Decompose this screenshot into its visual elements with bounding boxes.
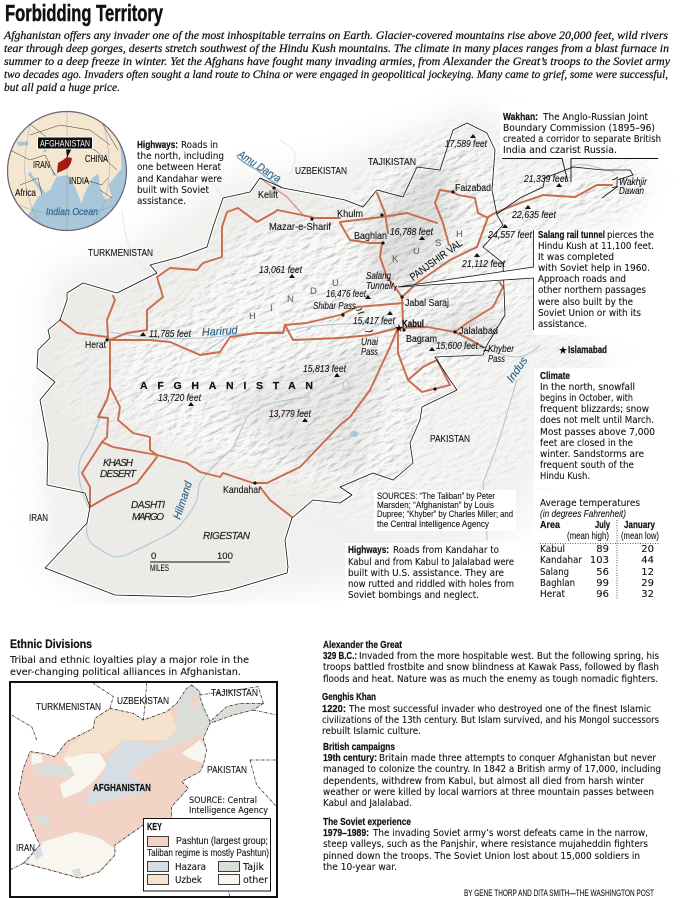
history: The Soviet experience: The Soviet experience xyxy=(323,816,411,828)
temperature table: (mean high) xyxy=(567,530,609,542)
ethnic regions xyxy=(10,683,277,897)
elevation and pass labels xyxy=(149,138,647,420)
annotation: Wakhan: Wakhan: xyxy=(503,111,538,123)
temperature table: 12 xyxy=(641,567,654,578)
city labels: Mazar-e-Sharif xyxy=(269,221,331,233)
pass markers xyxy=(356,177,618,351)
elevation and pass labels: 11,785 feet xyxy=(149,328,192,340)
relief labels: Hindu Kush: U xyxy=(332,278,339,289)
Afghanistan land xyxy=(37,123,505,597)
annotation: Salang rail tunnel: Hindu Kush at 11,100 feet. xyxy=(538,241,654,252)
scale bar xyxy=(150,551,233,574)
annotation: Salang rail tunnel: Salang rail tunnel xyxy=(538,229,605,241)
history: The Soviet experience: pinned down the troops. The Soviet Union lost about 15,000 soldiers in xyxy=(323,851,640,862)
key: KEY xyxy=(147,821,162,833)
river labels: Harirud xyxy=(201,324,239,339)
relief labels: Hindu Kush xyxy=(249,229,463,322)
Pashtun base xyxy=(18,685,263,878)
annotation: northern highways: one between Herat xyxy=(137,162,221,173)
annotation: northern highways: Roads in xyxy=(181,140,218,151)
annotation: southern highways: Highways: xyxy=(348,544,389,556)
city labels: Jabal Saraj xyxy=(405,297,449,309)
elevation and pass labels: 24,557 feet xyxy=(487,229,533,241)
rivers xyxy=(79,140,615,557)
annotation: Salang rail tunnel xyxy=(538,229,654,330)
shaded relief xyxy=(50,121,648,518)
temperature table: 89 xyxy=(596,544,609,555)
leader: Salang tunnel xyxy=(398,230,534,330)
intro paragraph: summer to a deep freeze in winter. Yet the Afghans have fought many invading armies, from Alexander the Great’s troops to the Soviet army xyxy=(4,54,671,68)
annotation: climate: frequent blizzards; snow xyxy=(540,404,649,415)
temperature table: Area xyxy=(540,519,560,531)
globe labels: Africa xyxy=(15,187,36,199)
elevation and pass labels: 22,635 feet xyxy=(511,209,557,221)
intro paragraph: but all paid a huge price. xyxy=(4,80,120,94)
scale bar: 0 xyxy=(151,551,156,562)
landmass xyxy=(8,112,122,215)
annotation: Salang rail tunnel: with Soviet help in 1960. xyxy=(538,263,650,274)
source note: SOURCE: Central xyxy=(189,796,257,806)
relief labels: Hindu Kush: I xyxy=(270,303,273,314)
intro paragraph: tear through deep gorges, deserts stretch southwest of the Hindu Kush mountains. The climate in many places ranges from a blast furnace in xyxy=(4,41,669,55)
history: Genghis Khan xyxy=(322,691,659,737)
ocean xyxy=(7,111,127,231)
highways xyxy=(60,178,612,517)
annotation: climate xyxy=(540,370,655,482)
river labels: Amu Darya xyxy=(235,148,283,185)
relief labels: Hindu Kush: D xyxy=(310,286,317,297)
Wakhan corridor border xyxy=(497,167,633,214)
temperature table: 96 xyxy=(596,589,609,600)
annotation: northern highways: assistance. xyxy=(137,196,186,207)
annotation: climate: Most passes above 7,000 xyxy=(540,427,655,438)
temperature table: Herat xyxy=(540,589,565,600)
temperature table: 20 xyxy=(641,544,654,555)
elevation and pass labels: 13,720 feet xyxy=(158,392,202,404)
region labels xyxy=(100,458,252,542)
city labels xyxy=(85,182,607,496)
country labels: TURKMENISTAN xyxy=(88,247,153,259)
history: The Soviet experience: The invading Soviet army’s worst defeats came in the narrow, xyxy=(372,828,648,839)
country and neighbour borders xyxy=(10,683,277,897)
history: Alexander the Great xyxy=(323,639,659,685)
city labels: Faizabad xyxy=(455,182,491,194)
country labels: IRAN xyxy=(29,512,48,524)
annotation: Wakhan: Boundary Commission (1895–96) xyxy=(503,123,655,134)
annotation: northern highways: and Kandahar were xyxy=(137,174,222,185)
darker mountain shading xyxy=(370,160,450,290)
history: British campaigns xyxy=(323,741,661,809)
annotation: Salang rail tunnel: pierces the xyxy=(607,230,654,241)
locator globe xyxy=(6,110,128,232)
heading: ethnic divisions: Ethnic Divisions xyxy=(10,637,92,651)
region labels: MARGO xyxy=(132,512,166,523)
country labels: PAKISTAN xyxy=(430,433,470,445)
annotation: Salang rail tunnel: assistance. xyxy=(538,319,587,330)
elevation and pass labels: Unai xyxy=(361,336,379,348)
annotation: northern highways: the north, including xyxy=(137,151,224,162)
Afghanistan callout tag: AFGHANISTAN xyxy=(40,138,90,150)
history: The Soviet experience xyxy=(323,816,648,873)
history: Alexander the Great: 329 B.C.: xyxy=(323,650,357,662)
region labels: DASHTI xyxy=(131,500,167,511)
annotation: southern highways: Soviet bombings and neglect. xyxy=(348,590,479,601)
elevation and pass labels: 16,476 feet xyxy=(326,288,367,300)
history: British campaigns: Kabul and Jalalabad. xyxy=(323,798,412,809)
sources note: Dupree; “Khyber” by Charles Miller; and xyxy=(377,509,513,520)
map labels: TAJIKISTAN xyxy=(211,687,258,699)
annotation: Salang rail tunnel: It was completed xyxy=(538,252,614,263)
sources note xyxy=(377,491,513,530)
elevation and pass labels: Khyber xyxy=(488,343,514,355)
annotation: climate: winter. Sandstorms are xyxy=(540,449,644,460)
city labels: Khulm xyxy=(337,208,363,220)
globe labels: CHINA xyxy=(85,153,108,165)
history: Genghis Khan: rebuilt Islamic culture. xyxy=(322,726,421,737)
elevation and pass labels: Wakhjir xyxy=(619,176,647,188)
elevation and pass labels: 15,813 feet xyxy=(303,363,347,375)
globe labels: IRAN xyxy=(33,159,50,171)
map labels: PAKISTAN xyxy=(207,764,247,776)
elevation and pass labels: 16,788 feet xyxy=(390,226,434,238)
map labels xyxy=(16,687,258,854)
key: Hazara xyxy=(175,862,206,873)
history: The Soviet experience: the 10-year war. xyxy=(323,862,397,873)
elevation and pass labels: Tunnel xyxy=(366,280,392,292)
other groups xyxy=(27,740,207,877)
ethnic map panel xyxy=(10,682,277,897)
annotation: southern highways: now rutted and riddled with holes from xyxy=(348,579,514,590)
annotation: southern highways: Roads from Kandahar to xyxy=(393,545,499,556)
scale bar: MILES xyxy=(150,563,169,574)
map labels: AFGHANISTAN xyxy=(93,782,151,794)
city labels: Kandahar xyxy=(223,484,261,496)
region labels: RIGESTAN xyxy=(203,531,252,542)
Panjshir Valley label: PANJSHIR VAL xyxy=(408,237,465,283)
city labels: Jalalabad xyxy=(459,325,498,337)
key xyxy=(144,818,270,891)
key: Tajik xyxy=(242,862,264,873)
Tajik region xyxy=(157,686,209,750)
elevation and pass labels: Pass xyxy=(361,346,379,358)
annotation: climate: frequent south of the xyxy=(540,460,634,471)
elevation and pass labels: Salang xyxy=(366,270,391,282)
temperature table: Kandahar xyxy=(540,555,583,566)
Afghanistan highlighted xyxy=(57,157,72,173)
map labels: TURKMENISTAN xyxy=(36,701,101,713)
elevation and pass labels: 17,589 feet xyxy=(445,138,488,150)
temperature table: Baghlan xyxy=(540,578,575,589)
title: Forbidding Territory xyxy=(5,0,163,26)
annotation: climate: Climate xyxy=(540,370,570,382)
annotation: southern highways: built with U.S. assistance. They are xyxy=(348,568,504,579)
key: Taliban regime is mostly Pashtun) xyxy=(147,847,269,859)
history: Genghis Khan: 1220: xyxy=(322,703,346,715)
annotation: northern highways: built with Soviet xyxy=(137,185,209,196)
temperature table: Average temperatures xyxy=(540,498,640,509)
surrounding terrain halo xyxy=(40,105,650,605)
region labels: KHASH xyxy=(103,458,135,469)
border line xyxy=(37,123,505,597)
temperature table: 103 xyxy=(590,555,609,566)
city labels: Bagram xyxy=(406,333,437,345)
main map of Afghanistan xyxy=(30,108,652,604)
Uzbek region xyxy=(63,710,177,758)
region labels: DESERT xyxy=(100,469,138,480)
intro paragraph: Afghanistan offers any invader one of the most inhospitable terrains on Earth. Glacier-covered mountains rise above 20,000 feet, wild rivers xyxy=(3,28,668,42)
history: The Soviet experience: steep valleys, such as the Panjshir, where resistance mujaheddin fighters xyxy=(323,839,648,850)
map labels: IRAN xyxy=(16,842,35,854)
annotation: Salang rail tunnel: Approach roads and xyxy=(538,274,626,285)
river labels: Indus xyxy=(505,354,531,385)
relief labels: Hindu Kush: U xyxy=(413,246,420,257)
globe labels: INDIA xyxy=(69,175,89,187)
sources note: Marsden; “Afghanistan” by Louis xyxy=(377,500,494,511)
city labels: Herat xyxy=(85,339,106,351)
relief labels: Hindu Kush: K xyxy=(392,254,399,265)
history: British campaigns: 19th century: xyxy=(323,752,377,764)
scale bar: 100 xyxy=(217,551,233,562)
annotation: climate: Hindu Kush. xyxy=(540,471,590,482)
sources note: SOURCES: “The Taliban” by Peter xyxy=(377,491,495,502)
source note xyxy=(189,796,269,816)
ethnic divisions description: Tribal and ethnic loyalties play a major role in the xyxy=(9,655,249,666)
country labels: UZBEKISTAN xyxy=(295,165,347,177)
temperature table: Kabul xyxy=(540,544,565,555)
ethnic divisions description: ever-changing political alliances in Afghanistan. xyxy=(10,667,241,678)
key: Pashtun (largest group; xyxy=(176,835,268,847)
relief labels: Hindu Kush: H xyxy=(456,229,463,240)
seas xyxy=(16,140,123,194)
map frame xyxy=(10,682,277,897)
temperature table: 32 xyxy=(641,589,654,600)
elevation and pass labels: 21,112 feet xyxy=(461,258,506,270)
temperature table: January xyxy=(624,519,655,531)
history: British campaigns: dependents, withdrew from Kabul, but almost all died from harsh winter xyxy=(323,776,645,787)
annotation: climate: does not melt until March. xyxy=(540,415,654,426)
river labels: Hilmand xyxy=(171,479,195,521)
country labels: TAJIKISTAN xyxy=(368,156,416,168)
peak markers xyxy=(140,134,562,422)
elevation and pass labels: 15,600 feet xyxy=(436,340,479,352)
elevation and pass labels: 15,417 feet xyxy=(353,315,396,327)
history: The Soviet experience: 1979–1989: xyxy=(323,827,369,839)
history: Alexander the Great: Alexander the Great xyxy=(323,639,402,651)
elevation and pass labels: Shibar Pass xyxy=(313,300,357,312)
annotation: Wakhan: India and czarist Russia. xyxy=(503,145,617,156)
temperature table: 44 xyxy=(641,555,654,566)
temperature table: Salang xyxy=(540,567,569,578)
annotation: Wakhan: The Anglo-Russian Joint xyxy=(542,112,648,123)
elevation and pass labels: Pass xyxy=(488,353,506,365)
city labels: Kabul xyxy=(402,318,424,330)
annotation: southern highways: Kabul and from Kabul to Jalalabad were xyxy=(348,557,514,568)
history: Genghis Khan: Genghis Khan xyxy=(322,691,376,703)
country labels: AFGHANISTAN xyxy=(140,380,313,392)
river labels xyxy=(171,148,531,521)
city markers xyxy=(105,186,567,485)
temperature table: 56 xyxy=(596,567,609,578)
temperature table: (in degrees Fahrenheit) xyxy=(540,508,626,520)
annotation: southern highways xyxy=(348,544,514,601)
city labels: Baghlan xyxy=(354,230,387,242)
map labels: UZBEKISTAN xyxy=(117,695,169,707)
temperature table: 99 xyxy=(596,578,609,589)
elevation and pass labels: 13,061 feet xyxy=(259,264,303,276)
intro paragraph xyxy=(3,28,671,94)
temperature table: July xyxy=(595,519,610,531)
annotation: Salang rail tunnel: other northern passages xyxy=(538,285,646,296)
globe labels xyxy=(15,153,108,218)
relief labels: Hindu Kush: H xyxy=(249,311,256,322)
annotation: northern highways: Highways: xyxy=(137,139,178,151)
annotation: Salang rail tunnel: were also built by the xyxy=(538,297,633,308)
elevation and pass labels: Dawan xyxy=(619,185,644,197)
elevation and pass labels: 13,779 feet xyxy=(269,408,312,420)
history: British campaigns: British campaigns xyxy=(323,741,395,753)
annotation: Wakhan xyxy=(503,111,661,156)
temperature table: (mean low) xyxy=(621,530,659,542)
relief labels: Hindu Kush: N xyxy=(287,294,294,305)
relief labels: Hindu Kush: S xyxy=(435,238,441,249)
Hazara region xyxy=(83,740,163,805)
sources note: the Central Intelligence Agency xyxy=(377,519,489,530)
annotation: climate: feet are closed in the xyxy=(540,438,633,449)
graticule and borders xyxy=(10,120,118,198)
city labels: Kelift xyxy=(258,189,278,201)
source note: Intelligence Agency xyxy=(189,806,269,816)
annotation: northern highways xyxy=(137,139,224,207)
city labels: Islamabad xyxy=(568,344,607,356)
key: other xyxy=(243,875,269,886)
annotation: Salang rail tunnel: Soviet Union or with its xyxy=(538,308,641,319)
temperature table xyxy=(540,498,660,600)
leader: Wakhan xyxy=(502,158,658,182)
annotation: climate: In the north, snowfall xyxy=(540,382,635,393)
elevation and pass labels: 21,339 feet xyxy=(523,173,568,185)
panel backgrounds over the relief xyxy=(0,105,680,634)
globe labels: Indian Ocean xyxy=(46,207,98,218)
temperature table: 29 xyxy=(641,578,654,589)
country labels xyxy=(29,156,470,524)
key: Uzbek xyxy=(175,875,202,886)
ethnic divisions description xyxy=(9,655,249,678)
annotation: climate: begins in October, with xyxy=(540,393,633,404)
